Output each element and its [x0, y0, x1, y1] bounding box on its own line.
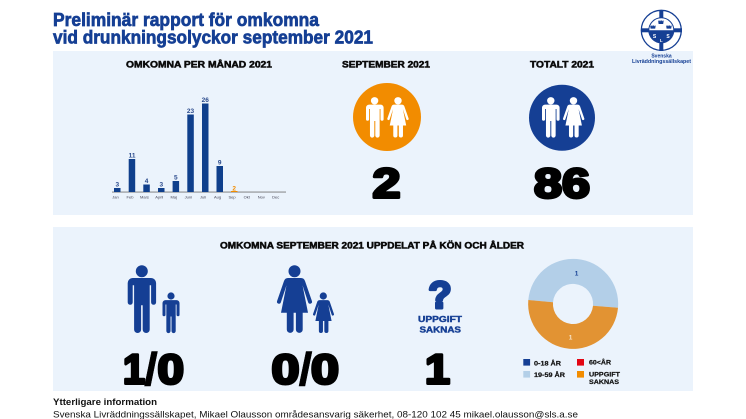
number: men and boys: 1 [123, 346, 145, 392]
bar chart: deaths per month: 4 [145, 178, 149, 185]
bar chart: deaths per month: Aug [214, 194, 221, 200]
bar chart: deaths per month: Feb [127, 194, 134, 200]
logo: Svenska Livräddningssällskapet: Livräddningssällskapet [632, 59, 691, 65]
bar chart: deaths per month [112, 97, 286, 200]
bar chart: deaths per month: Nov [258, 194, 265, 200]
title [53, 9, 373, 47]
heading: breakdown: OMKOMNA SEPTEMBER 2021 UPPDELAT PÅ KÖN OCH ÅLDER [220, 241, 525, 251]
label: information missing: SAKNAS [420, 324, 461, 334]
bar chart: deaths per month: 5 [174, 174, 178, 182]
legend: 0-18 ÅR [534, 360, 562, 367]
title: vid drunkningsolyckor september 2021 [53, 26, 373, 47]
bar chart: deaths per month: 3 [159, 182, 163, 188]
legend: 19-59 ÅR [534, 372, 566, 379]
panel: breakdown by gender and age [53, 227, 693, 395]
logo: Svenska Livräddningssällskapet: S [666, 34, 670, 40]
number: men and boys: / [144, 343, 158, 395]
logo: Svenska Livräddningssällskapet: Svenska [651, 54, 672, 60]
number: unknown: 1 [425, 346, 450, 392]
footer: further information: Ytterligare information [53, 397, 157, 408]
logo: Svenska Livräddningssällskapet [632, 10, 691, 65]
heading: September 2021: SEPTEMBER 2021 [342, 59, 430, 69]
bar chart: deaths per month: Juli [200, 194, 206, 200]
footer: further information [53, 397, 578, 419]
number: women and girls: 0 [311, 346, 339, 392]
legend: 60<ÅR [589, 360, 612, 367]
title: Preliminär rapport för omkomna [53, 9, 320, 30]
heading: deaths per month: OMKOMNA PER MÅNAD 2021 [126, 59, 272, 69]
bar chart: deaths per month: Juni [185, 194, 192, 200]
number: women and girls: 0 [272, 346, 300, 392]
logo: Svenska Livräddningssällskapet: S [653, 34, 657, 40]
icon: question mark: ? [428, 275, 452, 317]
icon: man and boy [128, 265, 180, 333]
label: information missing: UPPGIFT [418, 314, 463, 324]
number: men and boys [123, 343, 184, 395]
number: September total: 2 [372, 160, 400, 206]
bar chart: deaths per month: 3 [115, 182, 119, 188]
number: women and girls: / [298, 343, 313, 395]
bar chart: deaths per month: 2 [232, 186, 236, 192]
heading: total 2021: TOTALT 2021 [530, 59, 594, 69]
donut chart [528, 259, 618, 349]
legend: SAKNAS [589, 380, 619, 386]
logo: Svenska Livräddningssällskapet: L [660, 38, 663, 43]
bar chart: deaths per month: Okt [244, 194, 251, 200]
bar chart: deaths per month: Mars [140, 194, 149, 200]
number: women and girls [272, 343, 339, 395]
donut chart: 1 [575, 270, 579, 278]
icon: woman and girl [277, 265, 334, 333]
icon: blue circle with man and woman [529, 85, 595, 151]
bar chart: deaths per month: Sep [228, 194, 236, 200]
bar chart: deaths per month: 11 [129, 152, 136, 160]
bar chart: deaths per month: Dec [272, 194, 279, 200]
bar chart: deaths per month: 26 [202, 97, 209, 104]
donut chart: 1 [569, 334, 573, 342]
number: total 2021: 86 [534, 160, 590, 206]
bar chart: deaths per month: 23 [187, 108, 194, 115]
bar chart: deaths per month: April [155, 194, 163, 200]
legend: UPPGIFT [589, 372, 620, 378]
bar chart: deaths per month: Jan [112, 194, 119, 200]
legend [523, 359, 620, 386]
label: information missing [418, 314, 463, 334]
number: men and boys: 0 [158, 346, 184, 392]
bar chart: deaths per month: 9 [218, 160, 222, 166]
icon: orange circle with man and woman [353, 83, 421, 151]
bar chart: deaths per month: Maj [170, 194, 177, 200]
panel: top statistics [53, 51, 693, 215]
